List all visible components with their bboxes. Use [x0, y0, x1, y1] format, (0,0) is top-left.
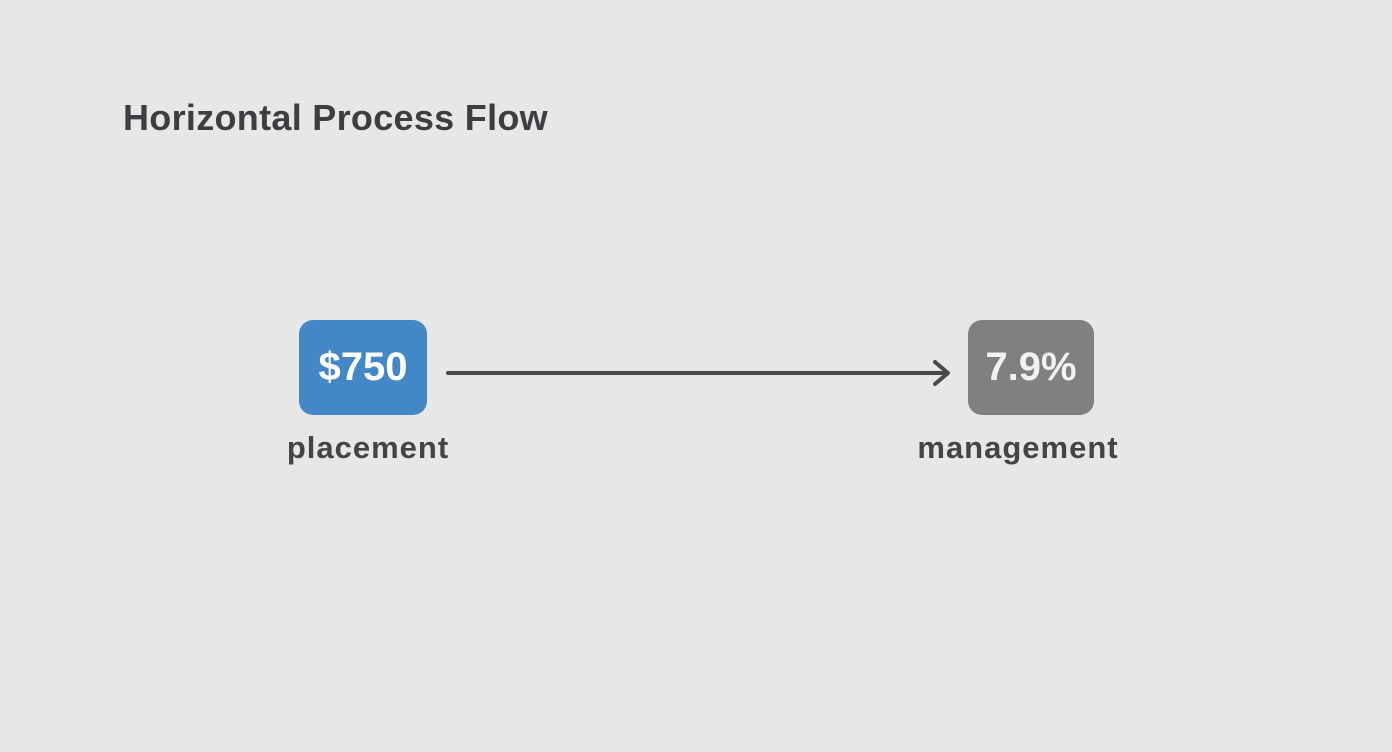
box: $750 [299, 320, 427, 415]
step: management [917, 320, 1119, 465]
step: placement [287, 320, 449, 465]
label: management: management [917, 430, 1119, 465]
label: placement: placement [287, 430, 449, 465]
box: $750: $750 [318, 345, 407, 389]
title: Horizontal Process Flow [123, 97, 548, 138]
box: 7.9% [968, 320, 1094, 415]
arrow [446, 360, 950, 386]
box: 7.9%: 7.9% [985, 345, 1077, 389]
